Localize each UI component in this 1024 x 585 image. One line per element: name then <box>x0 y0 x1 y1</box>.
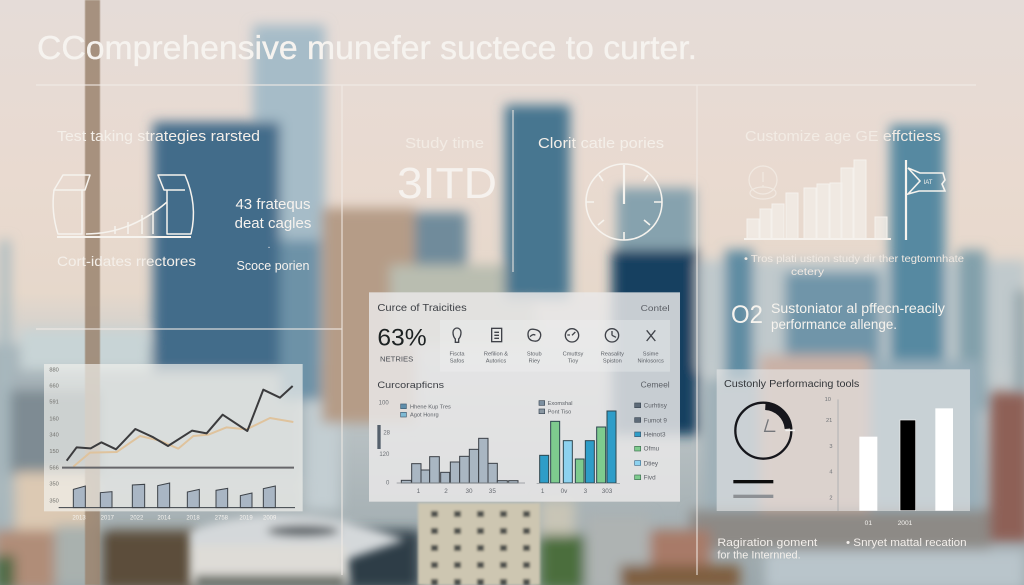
icon captions: Cmuttsy <box>563 352 584 358</box>
icon: clock <box>586 164 662 240</box>
y axis labels: 880 <box>49 368 59 374</box>
footnotes: • Snryet mattal recation <box>846 537 967 549</box>
bullet text: • Tros plati ustion study dir ther tegtomnhate <box>744 253 964 265</box>
legend: Fivd <box>644 474 656 481</box>
panel: test taking strategies <box>53 128 311 273</box>
icon captions: Riey <box>529 359 540 365</box>
bar chart: white and black: 2 <box>829 496 832 502</box>
y axis labels <box>49 368 59 504</box>
histogram: 28 <box>383 430 391 436</box>
icon captions: Safos <box>450 359 464 365</box>
panel: study time <box>397 136 497 208</box>
y axis labels: 591 <box>49 400 59 406</box>
x axis labels: 2014 <box>157 515 171 521</box>
icon: donut clock <box>735 403 795 459</box>
bullet text: cetery <box>791 266 825 278</box>
colored bar chart: 1 <box>541 488 545 495</box>
histogram <box>377 400 525 495</box>
x axis labels: 2017 <box>101 515 115 521</box>
heading: customize: Customize age GE effctiess <box>745 129 941 145</box>
icon: flag: IAT <box>924 180 933 186</box>
icon captions: Refilion & <box>484 352 508 358</box>
legend: Curhtisy <box>644 403 668 410</box>
center cream tower <box>418 503 540 585</box>
icon captions: Ninlosorcs <box>637 359 664 365</box>
histogram: Agot Honrg <box>410 413 439 419</box>
panel: chart categories clock <box>538 136 664 240</box>
x axis labels: 01 <box>865 520 872 527</box>
stat: study time value: 3ITD <box>397 159 497 208</box>
histogram: 0 <box>386 480 390 486</box>
stat: 02 callout: O2 <box>731 301 763 329</box>
colored bar chart: 3 <box>584 488 588 495</box>
bar chart: white and black: 3 <box>829 444 832 450</box>
colored bar chart: Exomshal <box>548 401 573 407</box>
x axis labels: 2013 <box>72 515 86 521</box>
stat: 02 callout: Sustoniator al pffecn-reacily <box>771 301 945 316</box>
curved white roof <box>190 515 405 585</box>
legend: Heinot3 <box>644 432 666 439</box>
icon: two containers with rising ramp <box>53 175 193 237</box>
icon: flag <box>906 160 945 240</box>
lower left buildings <box>15 472 93 534</box>
legend: Fumot 9 <box>644 417 667 424</box>
x axis labels: 2758 <box>215 515 229 521</box>
haze block behind panels <box>0 345 340 480</box>
y axis labels: 350 <box>49 498 59 504</box>
icon captions: Ssime <box>643 352 659 358</box>
legend: Dtiey <box>644 460 659 467</box>
label: candidates: Cort-idates rrectores <box>57 253 196 269</box>
colored bar chart: 0v <box>561 488 568 495</box>
x axis labels: 2001 <box>898 520 913 527</box>
bar chart: white and black: 4 <box>829 469 832 475</box>
heading: clock categories: Clorit catle pories <box>538 136 664 152</box>
callout: strategies count: 43 fratequs <box>235 196 311 213</box>
x axis labels: 2009 <box>263 515 277 521</box>
heading: performance tools: Custonly Performacing tools <box>724 379 860 390</box>
stat: 63%: 63% <box>377 324 427 351</box>
legend bars <box>733 480 773 483</box>
icon captions: Fiscta <box>449 352 465 358</box>
footnotes: for the Internned. <box>717 550 801 562</box>
heading: study time: Study time <box>405 136 484 152</box>
stat: 02 callout: performance allenge. <box>771 317 897 332</box>
bar chart: rising outlined bars <box>744 160 891 239</box>
histogram: 35 <box>489 488 496 495</box>
x axis labels <box>72 515 277 521</box>
y axis labels: 350 <box>49 482 59 488</box>
heading: test taking strategies: Test taking strategies rarsted <box>57 128 260 145</box>
panel: performance tools <box>717 369 970 562</box>
title: CComprehensive munefer suctece to curter. <box>37 29 697 66</box>
legend <box>635 403 668 481</box>
heading: curcorapficns: Curcorapficns <box>377 380 444 390</box>
bullet text <box>744 253 964 278</box>
icon captions: Stoub <box>527 352 542 358</box>
panel: dashboard: Contel <box>641 303 670 313</box>
x axis labels: 2019 <box>239 515 253 521</box>
callout: strategies count: Scoce porien <box>237 259 310 273</box>
small bars <box>73 483 275 508</box>
icon row <box>453 328 655 342</box>
histogram: 1 <box>417 488 421 495</box>
x axis labels: 2022 <box>130 515 144 521</box>
lower right buildings <box>540 500 575 540</box>
icon: alert figure <box>749 166 777 199</box>
colored bar chart <box>537 401 620 495</box>
y axis labels: 160 <box>49 416 59 422</box>
histogram: 100 <box>379 400 389 406</box>
icon captions: Spiston <box>603 359 622 365</box>
footnotes: Ragiration goment <box>717 537 817 549</box>
icon captions: Autorics <box>486 359 506 365</box>
callout: strategies count: deat cagles <box>235 215 311 232</box>
histogram: Hhene Kup Tres <box>410 404 451 410</box>
histogram: 2 <box>444 488 448 495</box>
y axis labels: 566 <box>49 465 59 471</box>
colored bar chart: 303 <box>602 488 613 495</box>
colored bar chart: Pont Tiso <box>548 409 571 415</box>
panel: line chart <box>44 364 303 521</box>
panel: dashboard: Cemeel <box>641 379 670 389</box>
panel: customize age effectiveness <box>731 129 964 332</box>
histogram: 120 <box>379 452 390 458</box>
histogram: 30 <box>465 488 473 495</box>
bar chart: white and black <box>825 397 953 511</box>
stat: 63%: NETRIES <box>380 354 413 363</box>
x axis labels <box>865 520 913 527</box>
frame dividers <box>36 85 976 575</box>
x axis labels: 2018 <box>186 515 200 521</box>
stat: 02 callout <box>731 301 945 332</box>
footnotes <box>717 537 967 562</box>
y axis labels: 660 <box>49 383 59 389</box>
bar chart: white and black: 10 <box>825 397 831 403</box>
bar chart: white and black: 21 <box>826 418 832 424</box>
panel: dashboard <box>369 292 680 502</box>
y axis labels: 150 <box>49 449 59 455</box>
legend: Ofmu <box>644 446 660 453</box>
icon captions: Reasality <box>601 352 624 358</box>
y axis labels: 340 <box>49 433 59 439</box>
foreground pole <box>85 0 100 585</box>
icon captions: Tioy <box>568 359 578 365</box>
stat: 63% <box>377 324 427 363</box>
callout: strategies count: . <box>268 240 270 251</box>
callout: strategies count <box>235 196 311 273</box>
heading: course of traicities: Curce of Traicities <box>377 303 467 314</box>
icon captions <box>449 352 664 365</box>
line series <box>67 386 293 467</box>
